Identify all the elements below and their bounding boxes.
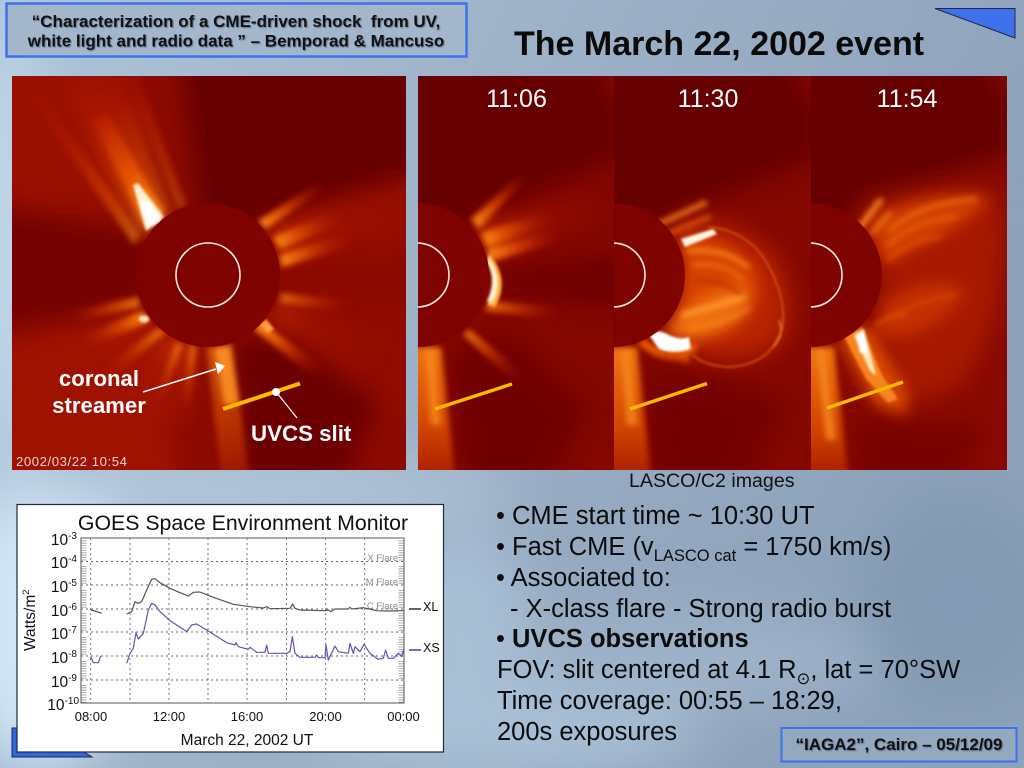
y axis tick labels [47,531,79,714]
caption: LASCO/C2 images: LASCO/C2 images [629,470,795,492]
occulter disc [418,203,489,347]
legend: XS: XS [423,641,440,655]
occulter disc [136,203,280,347]
x axis tick labels: 20:00 [309,709,342,724]
y axis title: 2 [21,589,32,595]
text block: event summary: = 1750 km/s) [736,533,891,561]
time labels: 11:06 [486,85,547,113]
text block: event summary: 200s exposures [497,718,677,746]
y axis tick labels: 10 [51,650,68,667]
text block: event summary: , lat = 70°SW [810,656,960,684]
text block: event summary: • UVCS observations [496,625,749,653]
y axis tick labels: -8 [68,649,77,660]
panel: LASCO image 10:54 [0,35,448,515]
icon: corner triangle [935,8,1015,38]
UVCS slit line 11:06 [435,384,512,409]
icon: lower left triangle [12,728,92,757]
header box: talk title [6,4,466,56]
series: XS [91,603,404,663]
panel: LASCO image 11:30 [614,76,880,470]
solar limb circle [176,243,240,307]
x axis tick labels: 00:00 [387,709,420,724]
x axis tick labels: 08:00 [75,709,107,724]
text block: event summary: Time coverage: 00:55 – 18:29, [497,687,842,715]
text block: event summary: FOV: slit centered at 4.1 R [497,656,797,684]
header box: talk title: white light and radio data ” – Bemporad & Mancuso [27,32,444,50]
label: coronal streamer [52,362,225,418]
legend: XL [409,600,438,614]
y axis tick labels: 10 [51,626,68,643]
text block: event summary: LASCO cat [654,547,737,565]
flare class labels: C Flare [367,601,398,612]
flare class labels [366,553,398,612]
UVCS slit marker [223,384,352,446]
UVCS slit marker: UVCS slit [251,421,352,446]
streamer rays: broad [80,76,322,411]
y axis tick labels: -10 [65,696,79,707]
label: coronal streamer: coronal [59,366,139,391]
x axis tick labels: 12:00 [153,709,185,724]
y axis tick labels: 10 [51,579,68,596]
streamer rays: fine [58,82,338,470]
y axis tick labels: -9 [68,673,77,684]
UVCS slit line 11:30 [630,384,707,409]
y axis title: Watts/m [22,595,39,651]
plot frame and grid [81,538,404,703]
text block: event summary: - X-class flare - Strong radio burst [510,595,891,623]
time labels: 11:30 [678,85,738,113]
series: XL [91,579,404,614]
time labels: 11:54 [877,85,937,113]
y axis tick labels: -4 [68,554,77,565]
text block: event summary: • CME start time ~ 10:30 UT [496,502,815,530]
text block: event summary: ⊙ [797,670,810,688]
text block: event summary: • Fast CME (v [496,533,654,561]
legend: XL: XL [423,600,438,614]
y axis tick labels: -7 [68,625,77,636]
y axis tick labels: 10 [51,674,68,691]
panel: GOES chart [17,504,444,752]
solar limb arc [614,242,646,308]
UVCS slit line 11:54 [827,382,903,408]
footer box: meeting [782,728,1016,762]
panel: LASCO image 11:54 [811,76,1007,470]
solar limb arc [418,242,450,308]
legend: XS [409,641,440,655]
y axis tick labels: 10 [51,603,68,620]
x axis tick labels [75,709,420,724]
panel: LASCO image 11:06 [345,35,657,515]
y axis tick labels: -6 [68,602,77,613]
timestamp: 2002/03/22 10:54 [16,454,127,469]
x axis tick labels: 16:00 [231,709,263,724]
solar limb arc [811,242,843,308]
occulter disc [614,203,685,347]
text block: event summary: • Associated to: [496,564,671,592]
footer box: meeting: “IAGA2”, Cairo – 05/12/09 [796,735,1002,754]
text block: event summary [496,502,960,746]
header box: talk title: “Characterization of a CME-driven shock from UV, [32,12,440,31]
y axis tick labels: -5 [68,578,77,589]
y axis tick labels: -3 [68,531,77,542]
y axis tick labels: 10 [51,555,68,572]
slide title: The March 22, 2002 event [514,25,924,63]
y axis tick labels: 10 [47,697,65,714]
occulter disc [811,203,882,347]
chart title: GOES Space Environment Monitor [78,511,408,535]
x axis title: March 22, 2002 UT [181,732,314,749]
time labels [486,85,937,113]
y axis tick labels: 10 [51,532,68,549]
flare class labels: M Flare [366,577,398,588]
flare class labels: X Flare [367,553,398,564]
label: coronal streamer: streamer [52,393,146,418]
